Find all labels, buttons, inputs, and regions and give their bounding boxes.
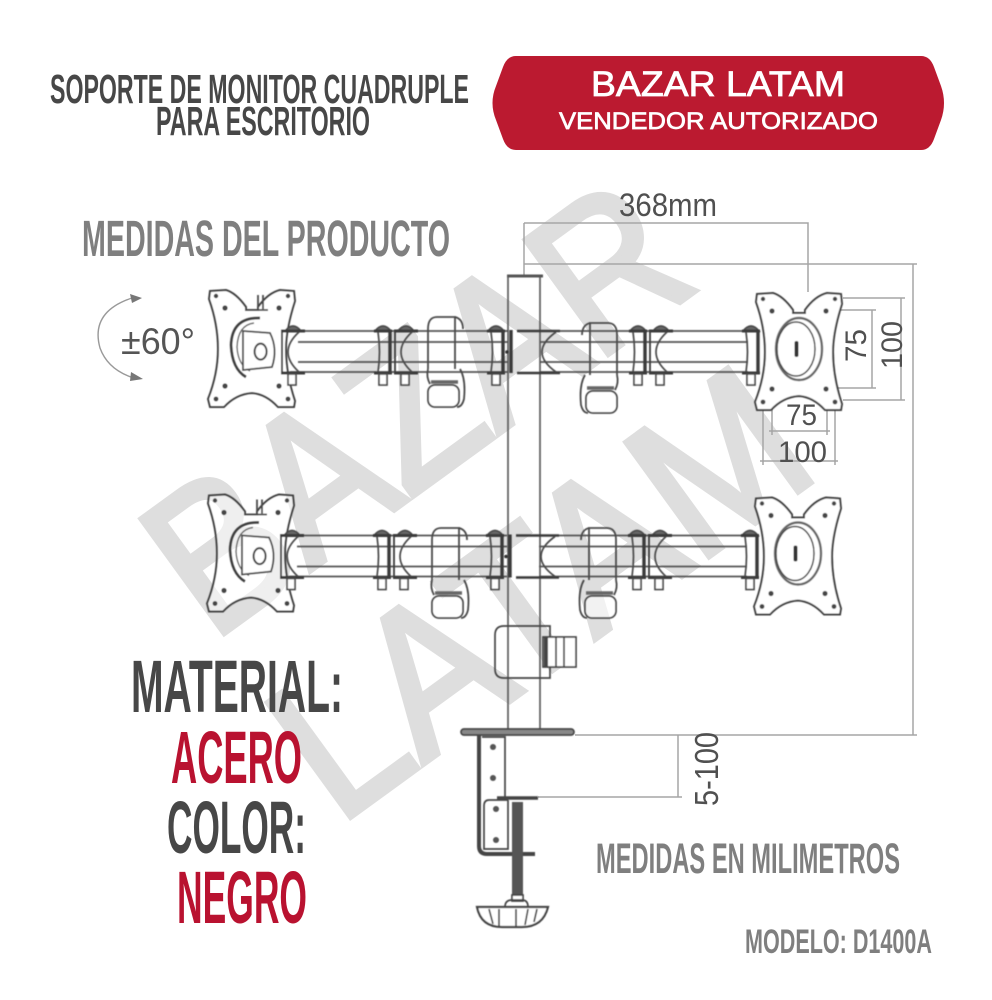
dimension labels: 100 [778, 436, 827, 469]
watermark: BAZAR LATAM: BAZAR [103, 136, 728, 678]
material and colour block: COLOR: [167, 786, 306, 869]
monitor arm diagram [207, 276, 842, 927]
height adjuster block [495, 626, 576, 678]
heading: product measurements: MEDIDAS DEL PRODUCTO [82, 210, 450, 267]
red seller badge: BAZAR LATAM [591, 65, 845, 104]
red seller badge [492, 56, 944, 150]
material and colour block: MATERIAL: [131, 645, 343, 728]
upper cable collars [427, 317, 618, 413]
material and colour block: NEGRO [177, 856, 307, 939]
material and colour block: ACERO [171, 716, 302, 799]
upper arm [208, 290, 842, 410]
red seller badge: VENDEDOR AUTORIZADO [559, 108, 878, 135]
dimension labels: 5-100 [688, 732, 725, 806]
dimension labels: 75 [786, 399, 817, 432]
watermark: BAZAR LATAM: LATAM [229, 324, 849, 862]
dimension labels: 75 [840, 329, 873, 362]
dimension lines [524, 223, 917, 797]
desk clamp [461, 729, 574, 927]
material and colour block [131, 645, 343, 939]
dimension labels: 368mm [619, 187, 717, 223]
product title: PARA ESCRITORIO [156, 98, 370, 144]
lower cable collars [431, 528, 617, 618]
vertical pole [507, 276, 543, 729]
product title: SOPORTE DE MONITOR CUADRUPLE [50, 66, 469, 112]
dimension labels: 100 [876, 321, 909, 369]
rotation indicator: plus minus 60 degrees: ±60° [121, 321, 195, 362]
watermark: BAZAR LATAM [103, 136, 849, 862]
lower arm [207, 494, 841, 614]
rotation indicator: plus minus 60 degrees [98, 294, 195, 381]
product title [50, 66, 469, 144]
dimension labels [619, 187, 909, 806]
